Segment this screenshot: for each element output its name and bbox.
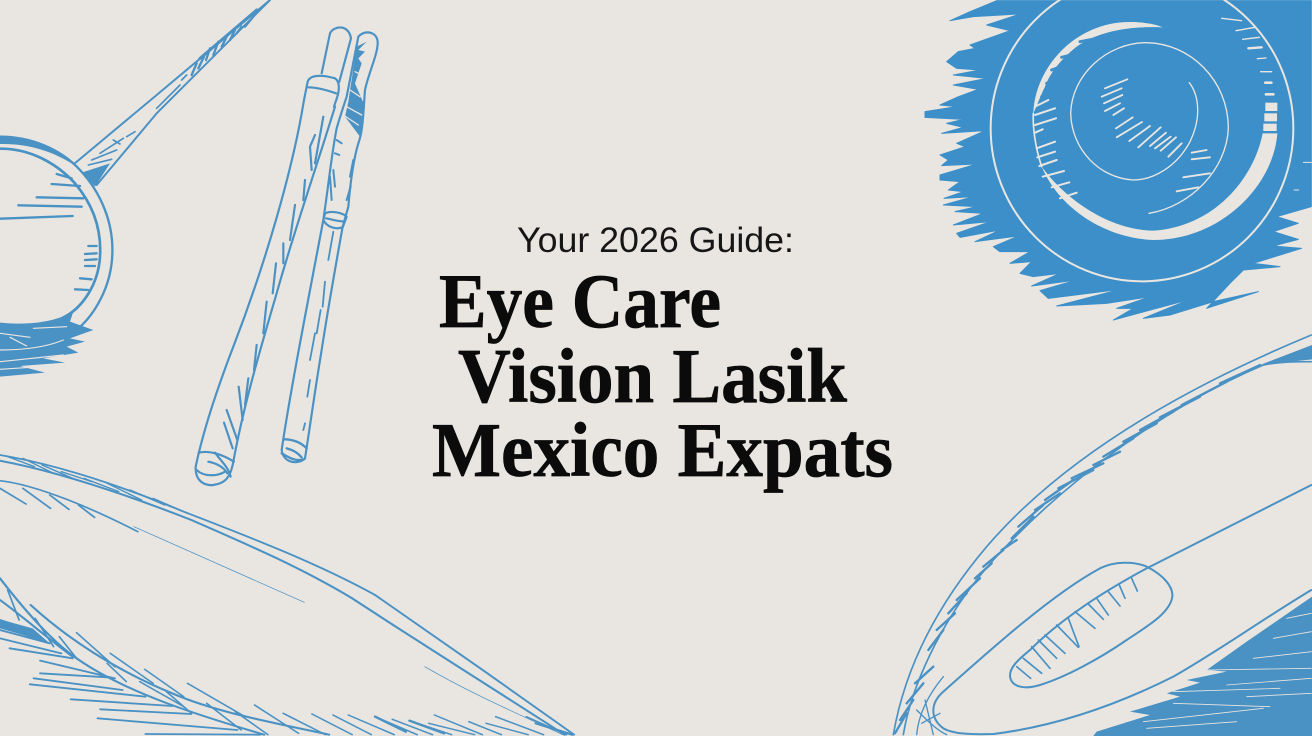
icon: blue sketched eye, top right xyxy=(925,0,1311,320)
lid cross hatching xyxy=(8,457,188,513)
magnifier lower hatching xyxy=(0,312,93,377)
stick collar xyxy=(304,76,339,107)
thin crease lines xyxy=(134,527,563,735)
outer lid line xyxy=(893,335,1311,735)
handle tip hatching xyxy=(192,17,253,75)
pupil hatch marks xyxy=(1102,79,1210,191)
lid hatching xyxy=(895,365,1260,733)
icon: large eye outline, bottom right xyxy=(893,335,1312,736)
blue shaded area xyxy=(1093,597,1312,736)
crescent blue hatch marks xyxy=(1042,34,1120,97)
upper lid lines xyxy=(0,455,574,735)
feather spines xyxy=(0,578,264,735)
left white hatch marks xyxy=(1035,100,1077,198)
stick end cap xyxy=(282,439,307,460)
outer iris ring xyxy=(991,0,1293,281)
feather barbs xyxy=(0,620,260,735)
magnifier handle xyxy=(74,0,270,185)
stick lower collar xyxy=(323,212,347,228)
stick body xyxy=(196,100,335,485)
lower lid and iris oval line xyxy=(933,485,1311,728)
icon: left applicator stick xyxy=(196,27,351,485)
icon: magnifying glass, top left xyxy=(0,0,270,377)
lower white crescent highlight xyxy=(1042,133,1277,240)
stick hatching xyxy=(224,117,323,448)
upper white crescent highlight xyxy=(1033,22,1163,113)
icon: large eye lash sketch, bottom left xyxy=(0,455,574,735)
inner lid line xyxy=(0,481,138,532)
stick grip shading xyxy=(345,42,367,137)
title line 1: Eye Care xyxy=(439,258,721,344)
iris hatching xyxy=(1017,578,1137,678)
small heading: Your 2026 Guide: xyxy=(517,221,794,260)
right white blocks xyxy=(1263,103,1277,131)
corner web lines xyxy=(917,677,947,735)
title xyxy=(432,258,893,493)
stick end cap xyxy=(197,452,234,477)
title line 2: Vision Lasik xyxy=(458,333,847,419)
title line 3: Mexico Expats xyxy=(432,407,893,493)
icon: right applicator stick xyxy=(282,32,378,462)
lower lid curve xyxy=(943,590,1311,734)
stick hatching xyxy=(303,232,333,430)
pupil rings xyxy=(1071,43,1228,213)
magnifier inner shading xyxy=(0,174,97,290)
magnifier ring xyxy=(0,137,112,349)
right side white strokes xyxy=(1222,18,1311,190)
